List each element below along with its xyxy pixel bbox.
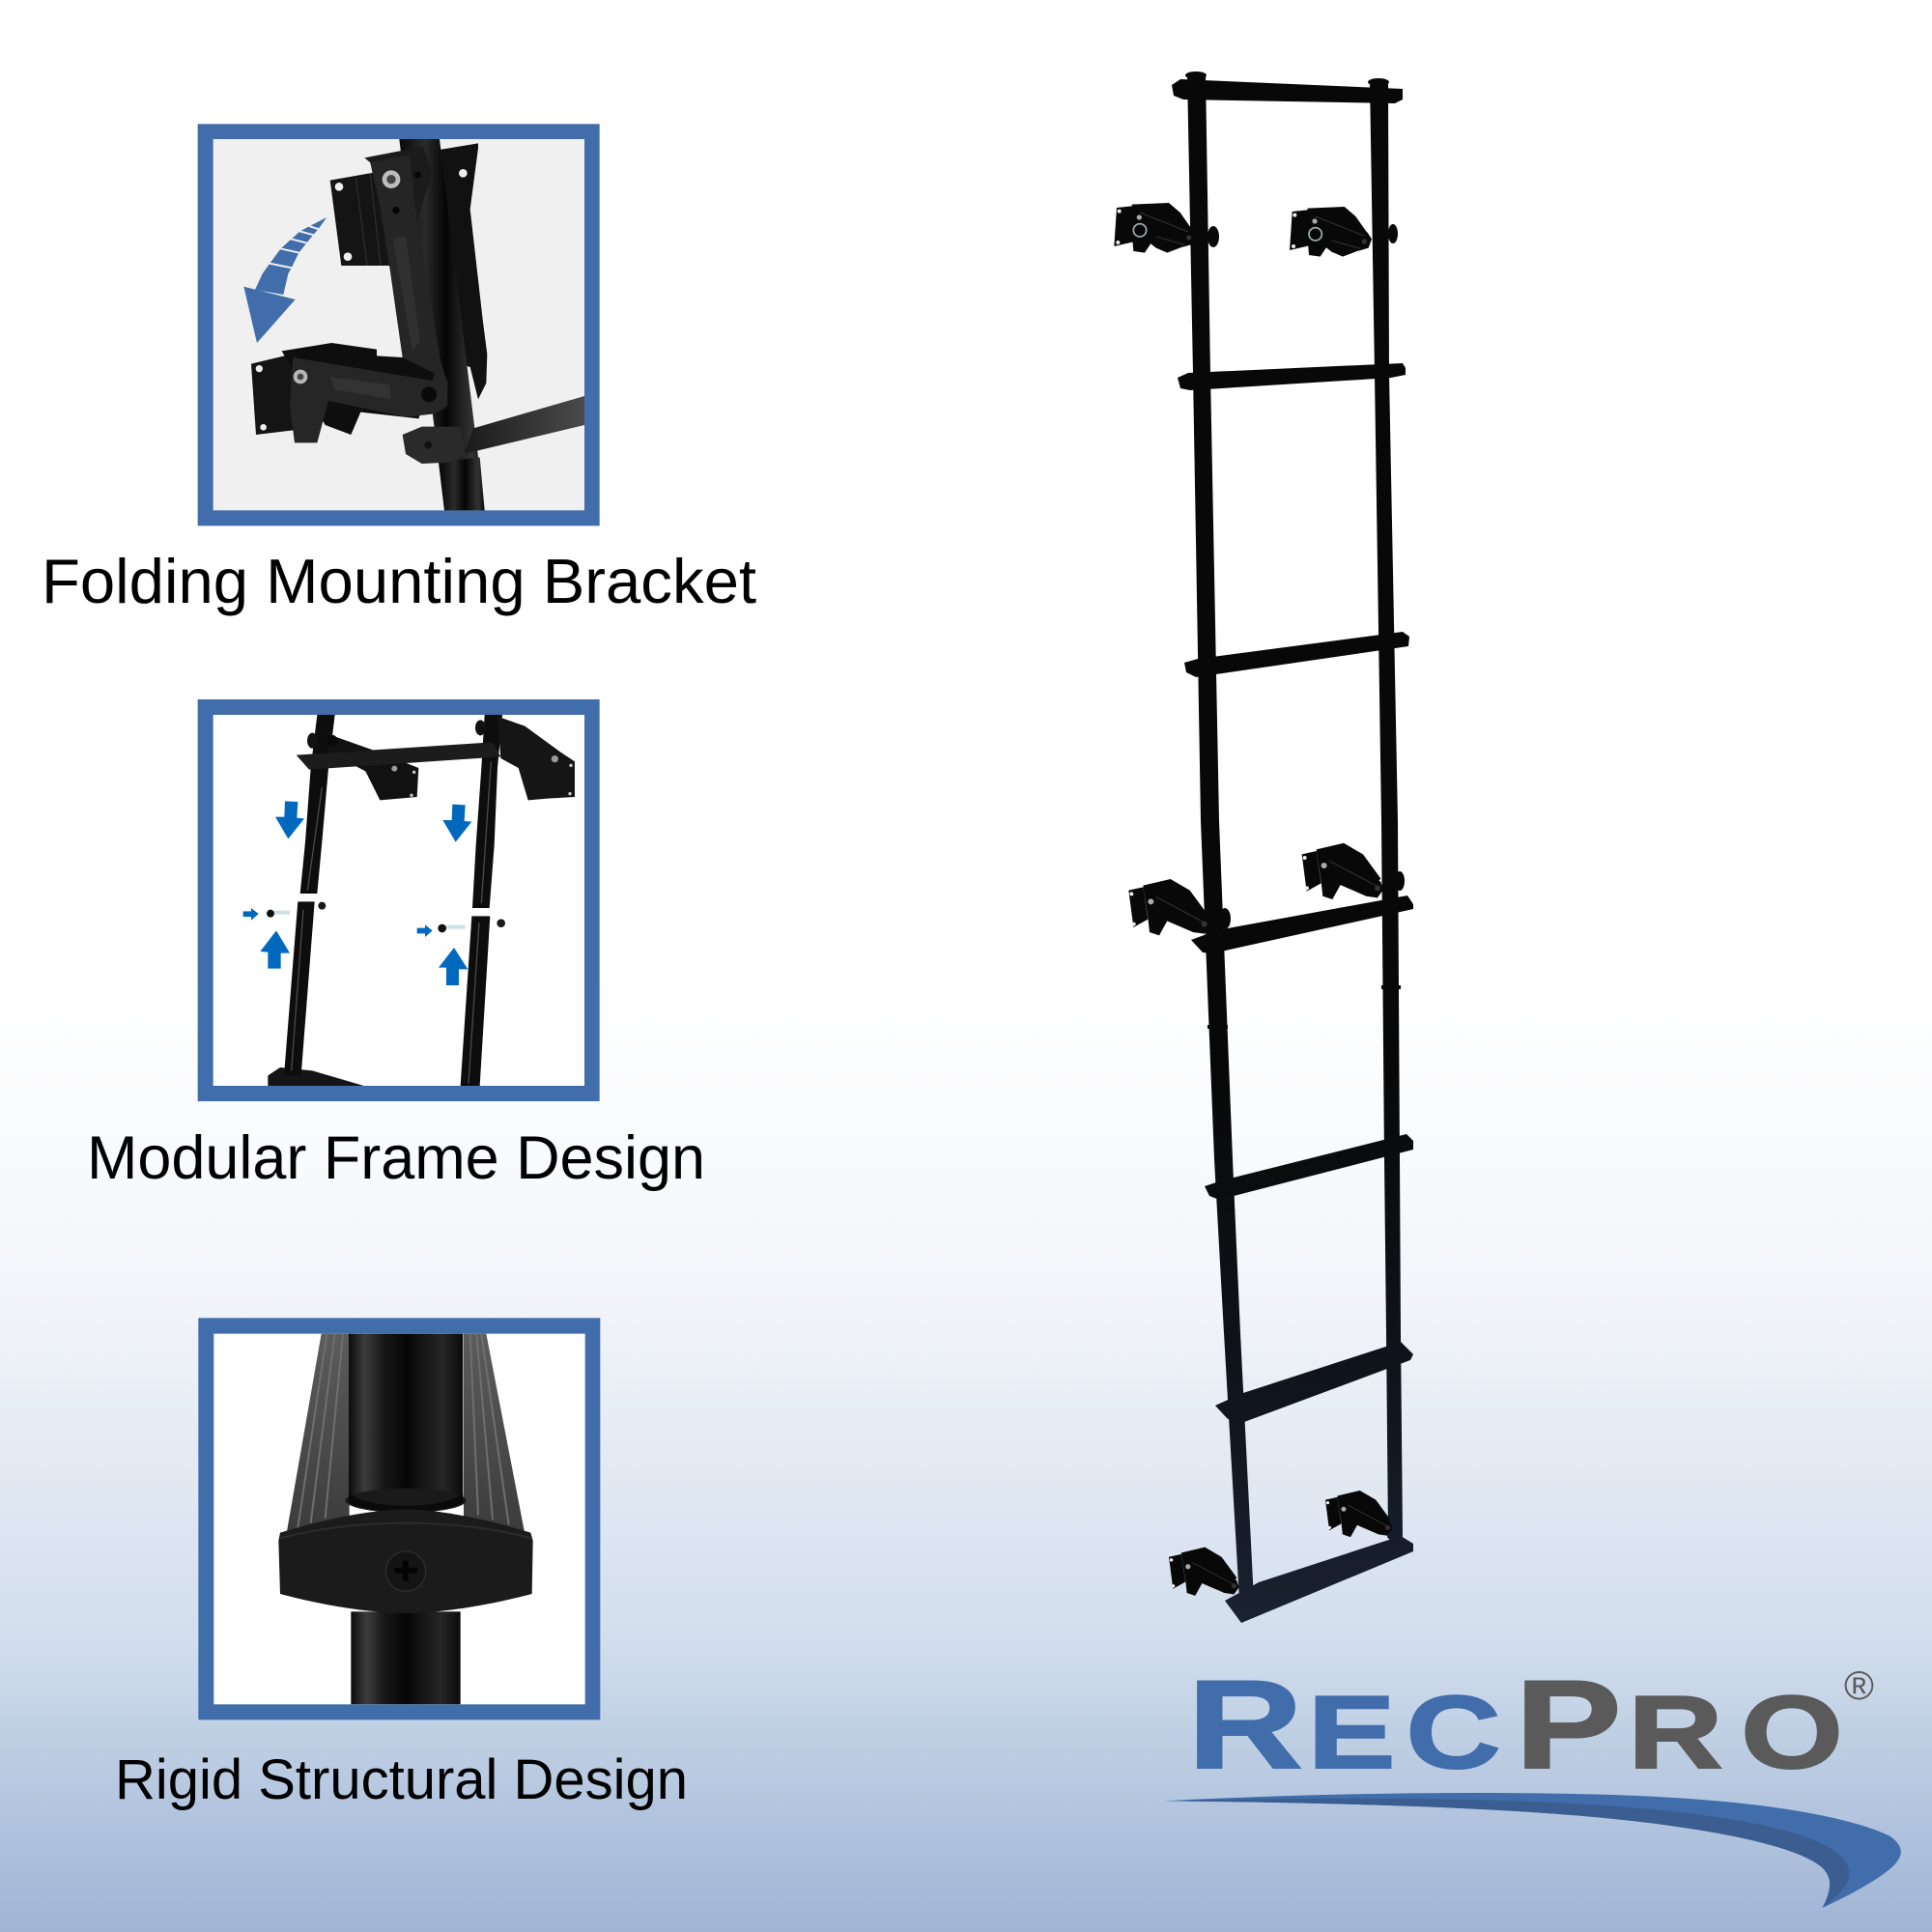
icon: assembly arrows xyxy=(243,801,471,985)
product photo: black ladder xyxy=(1114,71,1413,1623)
heading: rigid structural design: Rigid Structural Design xyxy=(115,1748,688,1811)
icon: phillips screw xyxy=(385,1551,426,1591)
right ladder rail xyxy=(1370,80,1403,1536)
rung 2 xyxy=(1178,363,1406,390)
rung 7: bottom step xyxy=(1225,1536,1413,1623)
logo wordmark: Rec: R xyxy=(1187,1655,1303,1795)
logo wordmark: Pro: RO xyxy=(1628,1674,1843,1790)
heading: folding mounting bracket: Folding Mounting Bracket xyxy=(42,546,756,616)
rung 4 xyxy=(1191,895,1413,953)
rung 5 xyxy=(1205,1134,1413,1200)
rung 3 xyxy=(1184,632,1409,677)
middle-right folding bracket xyxy=(1302,843,1383,899)
panel: rigid structural design xyxy=(198,1318,600,1719)
panel: modular frame design xyxy=(198,699,600,1101)
bottom-left folding bracket xyxy=(1169,1548,1239,1596)
logo wordmark: Rec: EC xyxy=(1308,1674,1501,1790)
rung 6 xyxy=(1215,1342,1413,1425)
panel: folding mounting bracket xyxy=(198,124,600,526)
middle-left folding bracket xyxy=(1128,879,1210,935)
icon: curved fold arrow xyxy=(243,217,327,343)
heading: modular frame design: Modular Frame Design xyxy=(87,1124,705,1192)
logo: RecPro xyxy=(1165,1655,1901,1908)
logo wordmark: Pro: P xyxy=(1515,1655,1622,1795)
top-left folding bracket xyxy=(1114,203,1196,253)
left ladder rail xyxy=(1187,73,1254,1601)
rail knobs and joints xyxy=(1185,71,1405,1541)
registered mark: ® xyxy=(1844,1662,1874,1708)
top-right folding bracket xyxy=(1290,207,1372,257)
icon: bolts and nuts xyxy=(267,902,505,932)
logo swoosh xyxy=(1165,1793,1901,1908)
rung 1 xyxy=(1172,79,1403,103)
bottom-right folding bracket xyxy=(1325,1491,1393,1537)
